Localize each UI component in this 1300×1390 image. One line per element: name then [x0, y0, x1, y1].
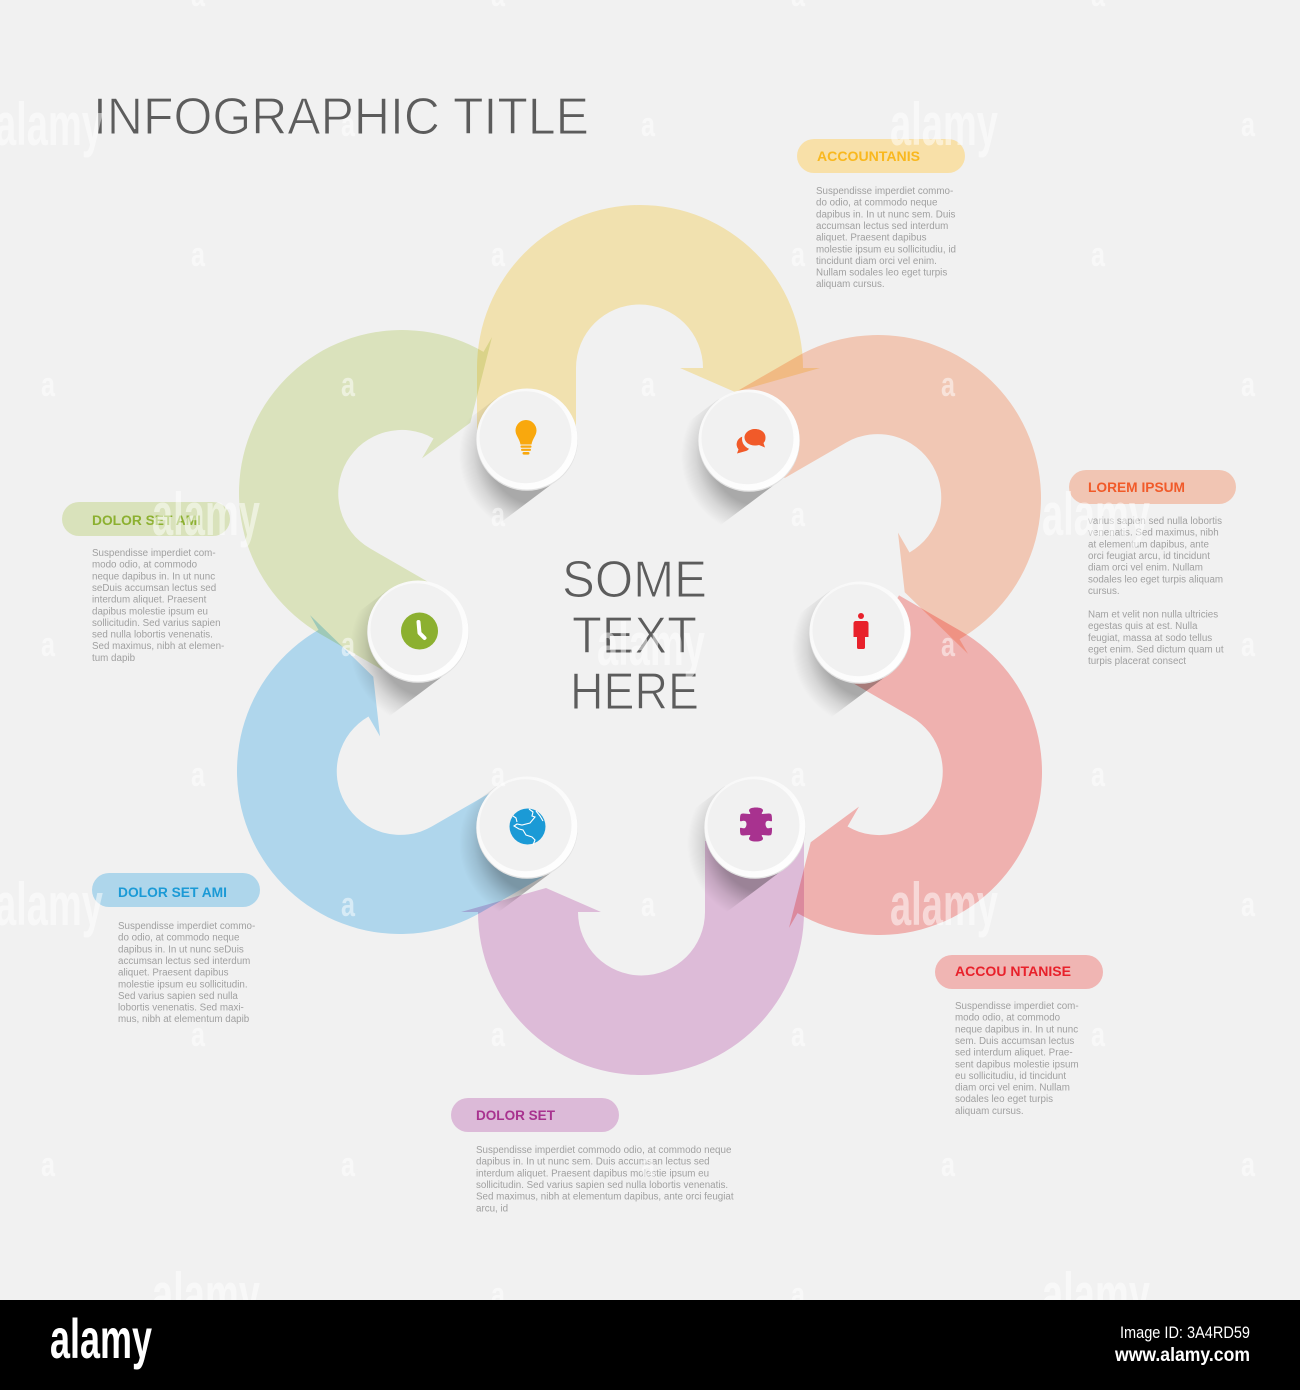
watermark overlay: alamy: [0, 91, 103, 158]
watermark overlay: a: [1241, 366, 1256, 404]
footer logo: alamy: [50, 1307, 152, 1370]
watermark overlay: a: [641, 366, 656, 404]
image id: Image ID: 3A4RD59: [1120, 1323, 1250, 1342]
panel: dolor set ami blue: accumsan lectus sed interdum: [118, 956, 250, 967]
panel: dolor set ami blue: lobortis venenatis. Sed maxi-: [118, 1003, 244, 1014]
panel: accou ntanise: diam orci vel enim. Nullam: [955, 1083, 1070, 1094]
watermark overlay: a: [191, 756, 206, 794]
panel: dolor set: sollicitudin. Sed varius sapien sed nulla lobortis venenatis.: [476, 1180, 728, 1191]
flower diagram of six curved arrows: [169, 205, 1109, 1075]
panel: accountanis: accumsan lectus sed interdum: [816, 221, 948, 232]
watermark overlay: a: [791, 496, 806, 534]
arrow: green: [179, 256, 553, 670]
panel: dolor set: DOLOR SET: [476, 1108, 556, 1123]
watermark overlay: a: [641, 886, 656, 924]
center text: HERE: [570, 662, 699, 720]
watermark overlay: a: [191, 236, 206, 274]
watermark overlay: alamy: [890, 871, 998, 938]
watermark overlay: a: [1091, 756, 1106, 794]
arrow: peach: [735, 275, 1109, 689]
panel: dolor set ami green: sollicitudin. Sed varius sapien: [92, 618, 221, 629]
panel: lorem ipsum: sodales leo eget turpis aliquam: [1088, 574, 1223, 585]
node: light bulb: [416, 388, 578, 540]
arrow: red: [728, 595, 1102, 1009]
panel: dolor set ami blue: Suspendisse imperdiet commo-: [118, 921, 255, 932]
panel: dolor set: interdum aliquet. Praesent dapibus molestie ipsum eu: [476, 1168, 709, 1179]
watermark overlay: a: [941, 1146, 956, 1184]
panel: dolor set ami blue: molestie ipsum eu sollicitudin.: [118, 979, 248, 990]
panel: lorem ipsum: venenatis. Sed maximus, nibh: [1088, 528, 1219, 539]
panel: accou ntanise: neque dapibus in. In ut nunc: [955, 1024, 1078, 1035]
panel: accou ntanise: sodales leo eget turpis: [955, 1094, 1053, 1105]
panel: accou ntanise: sem. Duis accumsan lectus: [955, 1036, 1074, 1047]
panel: dolor set ami green: modo odio, at commodo: [92, 560, 198, 571]
watermark overlay: a: [491, 1016, 506, 1054]
watermark overlay: a: [641, 1146, 656, 1184]
icon: clock: [401, 612, 438, 650]
panel: dolor set: [451, 1098, 734, 1214]
panel: lorem ipsum: eget enim. Sed dictum quam ut: [1088, 644, 1224, 655]
panel: accou ntanise: ACCOU NTANISE: [955, 964, 1071, 979]
panel: accountanis: aliquam cursus.: [816, 279, 885, 290]
watermark overlay: a: [341, 106, 356, 144]
panel: accou ntanise: [935, 955, 1103, 1117]
website: www.alamy.com: [1114, 1345, 1250, 1366]
watermark overlay: alamy: [890, 91, 998, 158]
node: person: [749, 582, 911, 733]
panel: dolor set ami green: interdum aliquet. Praesent: [92, 595, 207, 606]
icon: globe: [510, 808, 546, 845]
panel: accountanis: Suspendisse imperdiet commo-: [816, 186, 953, 197]
watermark overlay: a: [341, 886, 356, 924]
panel: lorem ipsum: varius sapien sed nulla lobortis: [1088, 516, 1222, 527]
watermark overlay: a: [1241, 626, 1256, 664]
panel: accountanis: Nullam sodales leo eget turpis: [816, 268, 947, 279]
watermark overlay: a: [491, 756, 506, 794]
watermark overlay: a: [1241, 886, 1256, 924]
watermark overlay: a: [41, 366, 56, 404]
panel: lorem ipsum: [1069, 470, 1236, 667]
watermark overlay: alamy: [152, 1261, 260, 1328]
panel: dolor set: arcu, id: [476, 1203, 508, 1214]
panel: accountanis: do odio, at commodo neque: [816, 198, 938, 209]
panel: accountanis: [797, 139, 965, 290]
panel: lorem ipsum: feugiat, massa at sodo tellus: [1088, 633, 1212, 644]
watermark overlay: a: [941, 626, 956, 664]
panel: dolor set ami green: seDuis accumsan lectus sed: [92, 583, 216, 594]
node: globe: [416, 776, 578, 928]
panel: lorem ipsum: orci feugiat arcu, id tincidunt: [1088, 551, 1210, 562]
panel: dolor set: dapibus in. In ut nunc sem. Duis accumsan lectus sed: [476, 1157, 710, 1168]
panel: accou ntanise: sent dapibus molestie ipsum: [955, 1059, 1079, 1070]
panel: dolor set ami blue: Sed varius sapien sed nulla: [118, 991, 238, 1002]
arrow: blue: [169, 580, 543, 994]
watermark overlay: a: [1091, 1016, 1106, 1054]
panel: accountanis: aliquet. Praesent dapibus: [816, 233, 927, 244]
watermark overlay: a: [41, 1146, 56, 1184]
panel: dolor set ami green: sed nulla lobortis venenatis.: [92, 630, 213, 641]
panel: accountanis: tincidunt diam orci vel enim.: [816, 256, 937, 267]
watermark overlay: a: [791, 1276, 806, 1314]
panel: accou ntanise: aliquam cursus.: [955, 1106, 1024, 1117]
watermark overlay: a: [191, 1016, 206, 1054]
watermark overlay: a: [941, 366, 956, 404]
watermark overlay: alamy: [1042, 1261, 1150, 1328]
panel: dolor set ami green: tum dapib: [92, 653, 136, 664]
watermark overlay: a: [341, 366, 356, 404]
panel: dolor set: Suspendisse imperdiet commodo odio, at commodo neque: [476, 1145, 732, 1156]
panel: accou ntanise: eu sollicitudiu, id tincidunt: [955, 1071, 1066, 1082]
panel: dolor set ami green: dapibus molestie ipsum eu: [92, 606, 208, 617]
node: speech bubbles: [638, 390, 800, 541]
footer bar: [0, 1300, 1300, 1390]
panel: lorem ipsum: at elementum dapibus, ante: [1088, 539, 1209, 550]
panel: lorem ipsum: egestas quis at est. Nulla: [1088, 621, 1198, 632]
icon: speech bubbles: [737, 428, 767, 454]
panel: dolor set ami green: [62, 502, 230, 664]
center text: TEXT: [572, 606, 697, 664]
panel: lorem ipsum: Nam et velit non nulla ultricies: [1088, 610, 1218, 620]
center text: [562, 550, 707, 720]
watermark overlay: a: [1241, 1146, 1256, 1184]
watermark overlay: a: [791, 1016, 806, 1054]
panel: accountanis: ACCOUNTANIS: [817, 149, 920, 164]
watermark overlay: a: [491, 1276, 506, 1314]
panel: dolor set ami blue: mus, nibh at elementum dapib: [118, 1014, 250, 1025]
watermark overlay: a: [491, 236, 506, 274]
icon: person: [854, 613, 868, 649]
panel: dolor set ami blue: aliquet. Praesent dapibus: [118, 968, 229, 979]
watermark overlay: a: [791, 236, 806, 274]
panel: dolor set ami blue: [92, 873, 260, 1025]
node: clock: [307, 580, 469, 732]
center text: SOME: [562, 550, 707, 608]
panel: dolor set ami blue: dapibus in. In ut nunc seDuis: [118, 944, 244, 955]
panel: lorem ipsum: LOREM IPSUM: [1088, 480, 1185, 495]
panel: dolor set ami green: neque dapibus in. In ut nunc: [92, 571, 215, 582]
watermark overlay: a: [1091, 236, 1106, 274]
panel: accou ntanise: modo odio, at commodo: [955, 1013, 1061, 1024]
watermark overlay: alamy: [152, 481, 260, 548]
watermark overlay: a: [641, 106, 656, 144]
panel: accountanis: dapibus in. In ut nunc sem. Duis: [816, 209, 956, 220]
node: puzzle piece: [644, 776, 806, 928]
watermark overlay: alamy: [597, 611, 705, 678]
panel: dolor set ami green: Suspendisse imperdiet com-: [92, 548, 216, 559]
panel: accountanis: molestie ipsum eu sollicitudiu, id: [816, 244, 956, 255]
watermark overlay: a: [341, 1146, 356, 1184]
panel: lorem ipsum: diam orci vel enim. Nullam: [1088, 563, 1203, 574]
panel: accou ntanise: Suspendisse imperdiet com-: [955, 1001, 1079, 1012]
panel: dolor set ami green: Sed maximus, nibh at elemen-: [92, 641, 224, 652]
watermark overlay: a: [41, 626, 56, 664]
icon: puzzle piece: [740, 808, 772, 842]
watermark overlay: a: [1241, 106, 1256, 144]
watermark overlay: a: [491, 496, 506, 534]
panel: dolor set ami blue: do odio, at commodo neque: [118, 933, 240, 944]
title: INFOGRAPHIC TITLE: [93, 87, 589, 145]
watermark overlay: alamy: [0, 871, 103, 938]
watermark overlay: alamy: [1042, 481, 1150, 548]
panel: dolor set: Sed maximus, nibh at elementum dapibus, ante orci feugiat: [476, 1192, 734, 1203]
watermark overlay: a: [791, 756, 806, 794]
panel: lorem ipsum: turpis placerat consect: [1088, 656, 1186, 667]
panel: lorem ipsum: cursus.: [1088, 586, 1120, 597]
icon: light bulb: [516, 420, 536, 455]
arrow: purple: [461, 841, 804, 1075]
panel: accou ntanise: sed interdum aliquet. Prae-: [955, 1048, 1073, 1059]
arrow: yellow: [477, 205, 820, 439]
watermark overlay: a: [341, 626, 356, 664]
panel: dolor set ami green: DOLOR SET AMI: [92, 513, 201, 528]
panel: dolor set ami blue: DOLOR SET AMI: [118, 885, 227, 900]
